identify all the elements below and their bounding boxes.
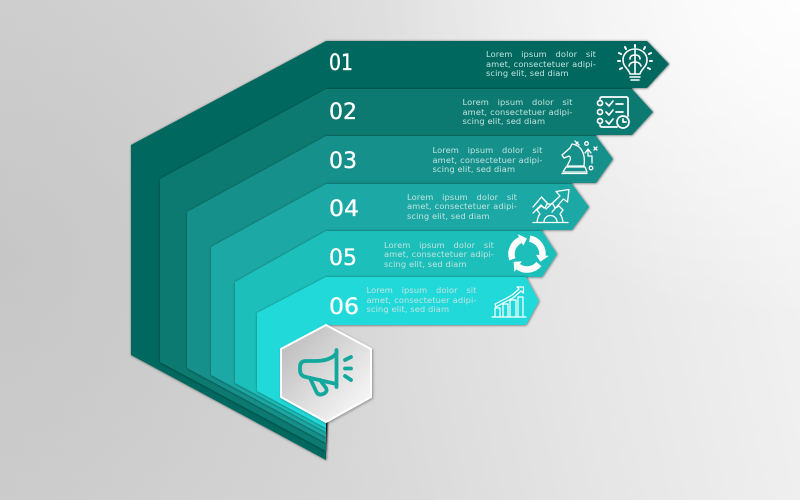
text block 05: Lorem ipsum dolor sit: [384, 240, 494, 250]
layer 4: [211, 184, 589, 437]
text block 02: scing elit, sed diam: [462, 116, 545, 126]
text block 05: scing elit, sed diam: [384, 258, 467, 268]
text block 05: [384, 240, 494, 268]
hexagon badge: [281, 325, 371, 422]
text block 01: scing elit, sed diam: [486, 68, 569, 78]
text block 02: [462, 97, 572, 126]
layer 1: [131, 41, 669, 460]
text block 01: amet, consectetuer adipi-: [486, 58, 596, 68]
text block 06: [366, 285, 476, 314]
text block 04: amet, consectetuer adipi-: [407, 201, 517, 211]
icon: checklist: [598, 97, 629, 128]
icon: gear with rising arrow: [533, 190, 569, 222]
icon: light bulb: [618, 45, 652, 80]
text block 06: amet, consectetuer adipi-: [366, 294, 476, 304]
text block 03: amet, consectetuer adipi-: [432, 154, 542, 164]
text block 03: scing elit, sed diam: [432, 164, 515, 174]
layer 5: [235, 231, 557, 432]
number 05: 05: [329, 246, 357, 271]
layer 3: [187, 136, 613, 443]
text block 03: Lorem ipsum dolor sit: [432, 145, 542, 155]
text block 04: scing elit, sed diam: [407, 210, 490, 220]
icon: chess knight: [562, 141, 597, 174]
text block 05: amet, consectetuer adipi-: [384, 249, 494, 259]
layer 2: [160, 89, 653, 451]
text block 02: Lorem ipsum dolor sit: [462, 97, 572, 107]
text block 03: [432, 145, 542, 174]
text block 04: [407, 192, 517, 220]
text block 01: [486, 49, 596, 78]
text block 02: amet, consectetuer adipi-: [462, 106, 572, 116]
number 02: 02: [329, 100, 357, 125]
number 03: 03: [329, 149, 357, 174]
icon: growth bar chart: [492, 287, 526, 317]
icon: cycle arrows: [511, 234, 549, 272]
number 01: 01: [329, 51, 353, 76]
icon: megaphone: [300, 350, 351, 395]
text block 06: scing elit, sed diam: [366, 304, 449, 314]
layer 6: [257, 277, 539, 428]
text block 06: Lorem ipsum dolor sit: [366, 285, 476, 295]
text block 04: Lorem ipsum dolor sit: [407, 192, 517, 202]
number 06: 06: [329, 295, 359, 320]
number 04: 04: [329, 197, 359, 222]
text block 01: Lorem ipsum dolor sit: [486, 49, 596, 59]
